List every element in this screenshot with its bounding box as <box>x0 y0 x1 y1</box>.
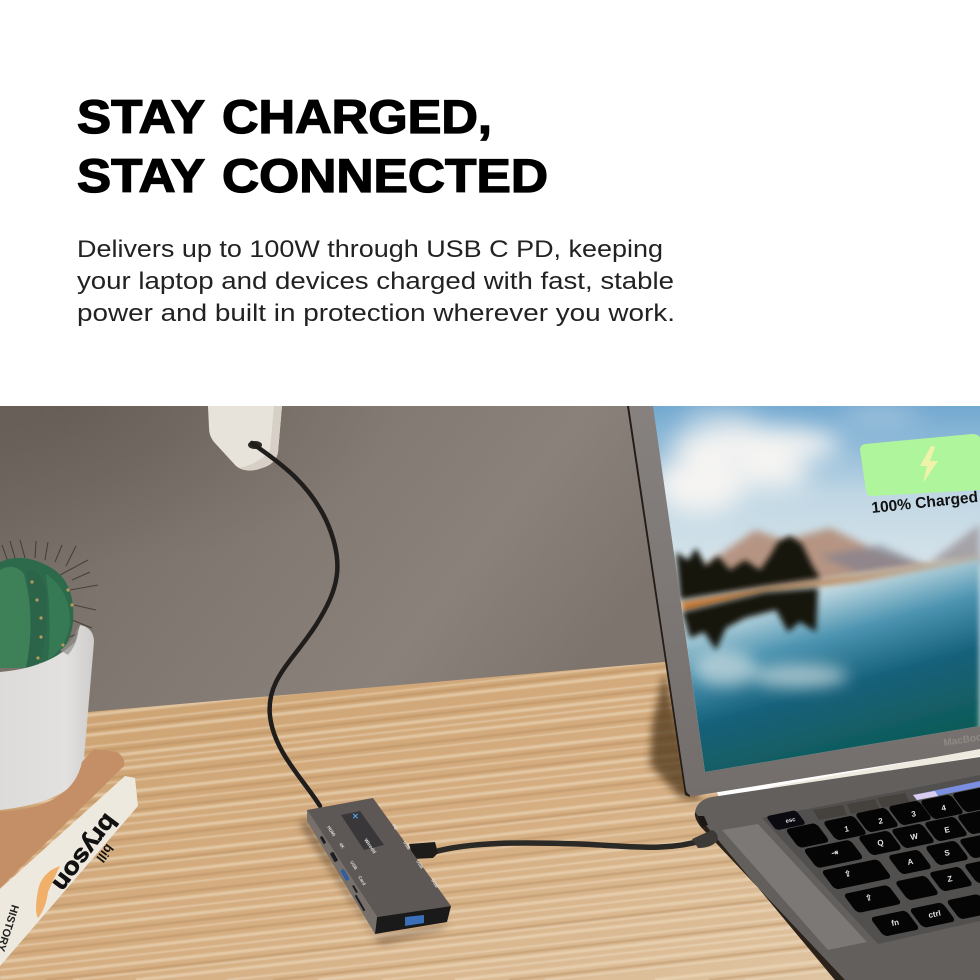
hub left side <box>307 810 377 934</box>
usb port <box>698 816 708 827</box>
icon: lightning bolt <box>920 446 938 483</box>
trees <box>676 536 820 600</box>
hub top <box>307 798 451 917</box>
hub connector <box>409 842 438 859</box>
books <box>0 749 138 966</box>
mountains <box>700 524 980 590</box>
desk <box>0 662 835 980</box>
wall charger <box>208 406 282 471</box>
clouds <box>655 409 920 513</box>
hub shadow <box>300 818 450 944</box>
key labels: ctrl <box>928 909 942 920</box>
keyboard well <box>762 775 980 944</box>
shoreline <box>680 554 980 612</box>
key labels: S <box>944 848 951 858</box>
function keys <box>813 793 910 820</box>
white book spine <box>0 776 138 966</box>
key labels: 1 <box>844 824 850 834</box>
hinge strip <box>770 749 980 792</box>
laptop base <box>695 757 980 980</box>
title: CHARGED, <box>222 90 492 143</box>
body text: your laptop and devices charged with fast, stable <box>77 268 674 295</box>
title: STAY <box>77 149 205 202</box>
key labels: fn <box>891 918 900 928</box>
key labels: 4 <box>941 803 947 813</box>
key labels: Q <box>877 838 885 848</box>
key labels: ⇥ <box>831 848 839 858</box>
usb-a port <box>405 915 424 926</box>
water cloud reflections <box>693 650 848 688</box>
book author: bill <box>93 841 117 865</box>
laptop screen photo <box>640 400 980 790</box>
water <box>680 555 980 772</box>
body text: power and built in protection wherever you work. <box>77 300 675 327</box>
hub brand text: Wiredd <box>362 838 377 855</box>
cactus plant <box>0 540 98 668</box>
title: STAY <box>77 90 205 143</box>
port labels: Card <box>357 875 367 886</box>
palm rest panel <box>722 824 867 950</box>
port labels <box>326 823 440 889</box>
port labels: HDMI <box>326 825 336 837</box>
charged label: 100% Charged <box>871 489 979 517</box>
key labels <box>785 803 953 928</box>
brown book <box>0 749 124 888</box>
battery badge <box>860 434 980 517</box>
hub front face <box>375 906 451 934</box>
side ports <box>320 836 365 911</box>
book title: bryson <box>47 808 123 897</box>
plant pot <box>0 625 94 810</box>
key labels: W <box>910 831 919 842</box>
body text <box>77 236 675 327</box>
body text: Delivers up to 100W through USB C PD, keeping <box>77 236 663 263</box>
title <box>77 90 548 202</box>
keys <box>766 787 980 937</box>
power cable <box>252 443 337 806</box>
port labels: USB <box>349 860 359 871</box>
usb hub <box>307 798 451 934</box>
wall <box>0 406 700 726</box>
port labels: PD <box>391 823 399 831</box>
laptop shadow on desk <box>650 672 700 800</box>
key labels: E <box>944 825 951 835</box>
photo scene <box>0 400 980 980</box>
key labels: 3 <box>911 809 917 819</box>
key labels: A <box>907 857 914 867</box>
port labels: USB <box>415 859 425 870</box>
title: CONNECTED <box>222 149 548 202</box>
book cover art <box>36 866 60 918</box>
hub display panel <box>341 811 384 850</box>
key labels: esc <box>785 817 797 825</box>
tree reflection <box>682 588 818 650</box>
laptop connector <box>692 830 718 848</box>
key labels: ⇪ <box>844 869 852 879</box>
laptop lid <box>627 406 980 797</box>
port labels: USB <box>402 840 412 851</box>
touch bar <box>913 781 980 800</box>
hub cable to laptop <box>409 830 718 859</box>
port labels: USB <box>430 878 440 889</box>
key labels: Z <box>947 874 953 884</box>
key labels: 2 <box>878 816 884 826</box>
hub logo: ✕ <box>352 812 359 821</box>
port labels: 4K <box>338 842 346 850</box>
key labels: ⇧ <box>865 893 873 903</box>
